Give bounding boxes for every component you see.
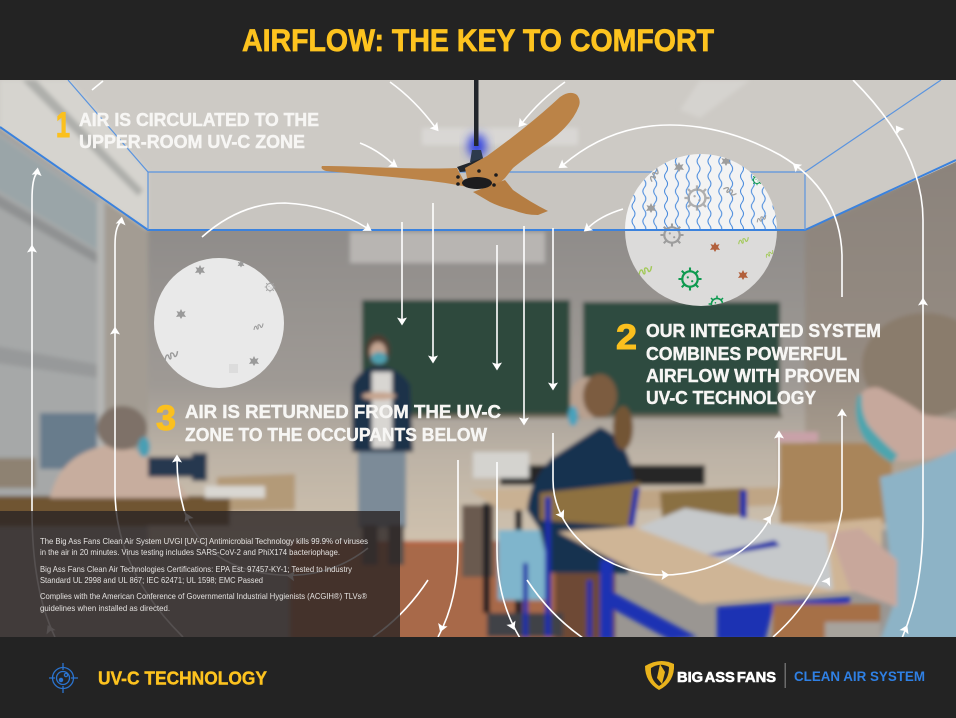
projector screen [350,232,545,263]
icon: UV-C target [49,663,78,693]
footer bar [0,637,956,718]
left window wall [0,125,148,520]
step 2 heading: AIRFLOW WITH PROVEN [646,365,860,386]
girl [498,530,546,600]
step 3 heading [156,399,501,445]
step 1 heading: 1 [56,106,70,145]
foreground desk and book [558,518,882,604]
boy [862,313,956,417]
photo background: classroom [0,80,956,643]
brand logo [645,661,925,690]
back desk and printer [500,465,705,485]
left desk and child [217,474,295,512]
floor [290,543,580,643]
disclaimer panel: Standard UL 2998 and UL 867; IEC 62471; UL 1598; EMC Passed [40,575,263,585]
right wall [805,155,956,530]
disclaimer panel [0,511,400,638]
step 1 heading: UPPER-ROOM UV-C ZONE [79,131,305,152]
teacher [358,448,406,528]
back wall [148,225,813,545]
ceiling [0,80,956,230]
step 2 heading [616,318,881,408]
ceiling fan [322,80,580,215]
disclaimer panel: Big Ass Fans Clean Air Technologies Certifications: EPA Est. 97457-KY-1; Tested to Industry [40,564,353,574]
disclaimer panel: guidelines when installed as directed. [40,603,170,613]
brand logo: BIG ASS FANS [677,670,776,686]
step 2 heading: 2 [616,318,637,357]
step 1 heading [56,106,319,152]
step 3 heading: AIR IS RETURNED FROM THE UV-C [185,401,501,422]
blue UV-C zone outline [0,80,956,230]
chairs [540,482,640,527]
header bar with title: AIRFLOW: THE KEY TO COMFORT [242,22,714,58]
step 2 heading: OUR INTEGRATED SYSTEM [646,320,881,341]
circle: clean returned air [154,258,284,388]
disclaimer panel: in the air in 20 minutes. Virus testing includes SARS-CoV-2 and PhiX174 bacteriophage. [40,547,340,557]
step 1 heading: AIR IS CIRCULATED TO THE [79,109,319,130]
step 3 heading: ZONE TO THE OCCUPANTS BELOW [185,424,487,445]
step 2 heading: COMBINES POWERFUL [646,343,847,364]
disclaimer panel: The Big Ass Fans Clean Air System UVGI [UV-C] Antimicrobial Technology kills 99.9% of viruses [40,536,368,546]
airflow arrows [27,80,928,638]
header bar with title [0,0,956,80]
circle: UV-C zone pathogens being neutralized [625,150,777,312]
step 3 heading: 3 [156,399,176,438]
cabinet [780,443,892,523]
disclaimer panel: Complies with the American Conference of Governmental Industrial Hygienists (ACGIH®) TLVs® [40,591,367,601]
step 2 heading: UV-C TECHNOLOGY [646,387,817,408]
chalkboards [362,300,570,415]
footer label: UV-C TECHNOLOGY [98,668,267,688]
brand logo: CLEAN AIR SYSTEM [794,669,925,684]
